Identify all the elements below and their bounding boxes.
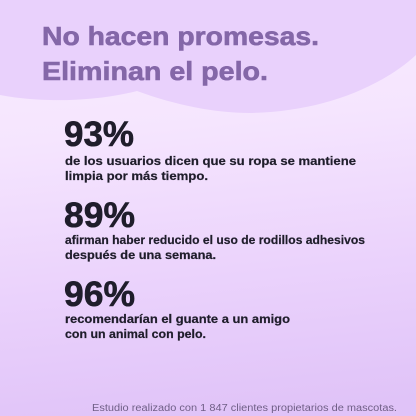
statistic: 96%: 96% [64,275,135,314]
statistic: 93%: de los usuarios dicen que su ropa se mantiene [65,156,356,168]
statistic: 96% [64,275,290,341]
header wave panel [0,0,416,113]
statistic: 89% [64,196,365,262]
statistic: 96%: con un animal con pelo. [65,329,206,341]
statistic: 89%: después de una semana. [65,250,216,262]
title [42,21,319,86]
title: Eliminan el pelo. [42,56,268,86]
footnote: Estudio realizado con 1 847 clientes propietarios de mascotas. [92,403,397,414]
statistic: 89%: afirman haber reducido el uso de rodillos adhesivos [65,235,365,247]
statistic: 96%: recomendarían el guante a un amigo [65,314,290,326]
statistic: 93% [64,115,356,183]
statistic: 89%: 89% [64,196,135,235]
title: No hacen promesas. [42,21,319,51]
statistic: 93%: 93% [64,115,134,154]
statistic: 93%: limpia por más tiempo. [65,171,208,183]
